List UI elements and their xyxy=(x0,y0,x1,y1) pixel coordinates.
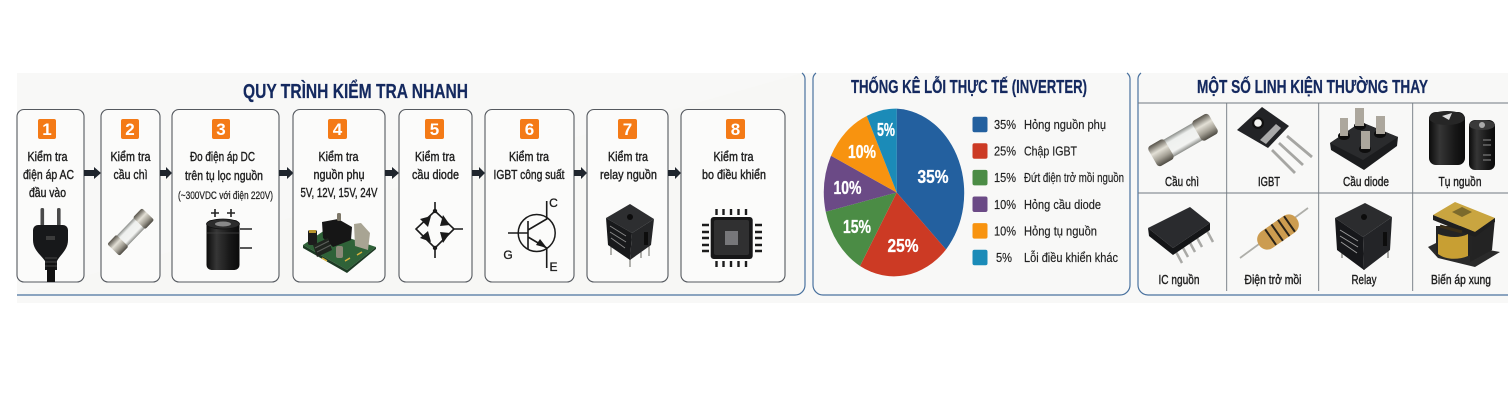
step 4 card: Kiểm tra xyxy=(318,149,359,164)
pie chart: 25% xyxy=(888,235,918,256)
pie chart: 5% xyxy=(877,119,895,140)
step 1 card: 1 xyxy=(42,120,52,139)
icon: fuse xyxy=(107,208,154,256)
legend: Hỏng tụ nguồn xyxy=(1024,223,1097,238)
step 4 card: 5V, 12V, 15V, 24V xyxy=(300,185,378,200)
pie chart: 35% xyxy=(918,166,948,187)
step 7 card: relay nguồn xyxy=(600,167,657,182)
pie chart: 15% xyxy=(843,216,871,237)
component: power IC xyxy=(1148,207,1213,287)
component: power capacitors xyxy=(1429,111,1495,189)
component: IGBT xyxy=(1237,107,1312,189)
icon: IGBT symbol: E xyxy=(549,260,558,274)
icon: relay xyxy=(606,204,654,267)
step 6 card: IGBT công suất xyxy=(494,167,565,182)
step 8 card xyxy=(681,110,785,282)
legend: 15% xyxy=(994,170,1016,185)
legend: 10% xyxy=(994,197,1016,212)
step 4 card: 4 xyxy=(333,120,343,139)
arrow 2 to 3 xyxy=(160,167,172,179)
step 7 card: 7 xyxy=(623,120,632,139)
arrow 7 to 8 xyxy=(668,167,681,179)
step 2 card: Kiểm tra xyxy=(110,149,151,164)
arrow 1 to 2 xyxy=(84,167,101,179)
icon: IGBT symbol: C xyxy=(549,196,558,210)
legend: 35% xyxy=(994,117,1016,132)
icon: diode bridge symbol xyxy=(416,202,463,258)
heading: components: MỘT SỐ LINH KIỆN THƯỜNG THAY xyxy=(1197,76,1428,97)
legend: 5% xyxy=(996,250,1012,265)
component: fusible resistor: Điện trở mồi xyxy=(1244,272,1302,287)
step 1 card: đầu vào xyxy=(29,185,66,200)
step 2 card: cầu chì xyxy=(114,167,148,182)
page background band xyxy=(17,73,1508,303)
component: power capacitors: Tụ nguồn xyxy=(1438,174,1482,189)
heading: statistics: THỐNG KÊ LỖI THỰC TẾ (INVERTER) xyxy=(851,76,1087,97)
step 6 card xyxy=(485,110,574,282)
step 3 card: Đo điện áp DC xyxy=(190,149,255,164)
step 3 card xyxy=(172,110,279,282)
panel: failure statistics xyxy=(813,73,1130,295)
component: fuse: Cầu chì xyxy=(1165,174,1199,189)
step 3 card: (~300VDC với điện 220V) xyxy=(178,190,273,202)
component: power IC: IC nguồn xyxy=(1158,272,1200,287)
pie chart xyxy=(824,109,964,276)
icon: power plug xyxy=(33,208,68,282)
component: bridge rectifier: Cầu diode xyxy=(1343,174,1389,189)
arrow 4 to 5 xyxy=(385,167,399,179)
step 2 card: 2 xyxy=(125,120,135,139)
step 5 card: 5 xyxy=(430,120,439,139)
legend xyxy=(972,117,1124,265)
legend: Đứt điện trở mồi nguồn xyxy=(1024,170,1124,185)
step 8 card: bo điều khiển xyxy=(702,167,766,182)
icon: IGBT symbol xyxy=(503,196,558,274)
step 6 card: Kiểm tra xyxy=(509,149,550,164)
arrow 6 to 7 xyxy=(574,167,587,179)
step 2 card xyxy=(101,110,160,282)
component: IGBT: IGBT xyxy=(1258,174,1280,189)
heading: process: QUY TRÌNH KIỂM TRA NHANH xyxy=(243,80,468,103)
panel: quick inspection process xyxy=(17,73,805,295)
step 6 card: 6 xyxy=(525,120,534,139)
pie chart: 10% xyxy=(848,141,876,162)
step 3 card: trên tụ lọc nguồn xyxy=(185,168,263,183)
component: fuse xyxy=(1147,113,1219,189)
step 5 card: cầu diode xyxy=(412,167,459,182)
step 8 card: Kiểm tra xyxy=(714,149,754,164)
step 7 card xyxy=(587,110,668,282)
icon: capacitor with polarity xyxy=(206,209,252,270)
step 5 card xyxy=(399,110,472,282)
icon: power supply board xyxy=(303,213,376,273)
component: relay: Relay xyxy=(1352,272,1377,287)
legend: Hỏng nguồn phụ xyxy=(1024,117,1106,132)
arrow 3 to 4 xyxy=(279,167,294,179)
pie chart: 10% xyxy=(834,177,862,198)
icon: microchip xyxy=(702,209,762,267)
legend: Chập IGBT xyxy=(1024,144,1077,159)
legend: Hỏng cầu diode xyxy=(1024,197,1101,212)
step 4 card: nguồn phụ xyxy=(314,167,364,182)
component: pulse transformer xyxy=(1428,202,1500,287)
step 7 card: Kiểm tra xyxy=(608,149,649,164)
component: relay xyxy=(1335,203,1392,287)
legend: 25% xyxy=(994,144,1016,159)
legend: 10% xyxy=(994,223,1016,238)
step 4 card xyxy=(293,110,385,282)
legend: Lỗi điều khiển khác xyxy=(1024,250,1118,265)
step 5 card: Kiểm tra xyxy=(415,149,456,164)
component: fusible resistor xyxy=(1240,208,1308,287)
step 3 card: 3 xyxy=(216,120,226,139)
panel: commonly replaced components xyxy=(1138,73,1508,295)
step 8 card: 8 xyxy=(731,120,740,139)
arrow 5 to 6 xyxy=(472,167,485,179)
component: bridge rectifier xyxy=(1330,108,1398,189)
step 1 card: Kiểm tra xyxy=(28,149,68,164)
step 1 card xyxy=(17,110,84,282)
component: pulse transformer: Biến áp xung xyxy=(1431,272,1491,287)
step 1 card: điện áp AC xyxy=(23,167,74,182)
icon: IGBT symbol: G xyxy=(503,248,513,262)
